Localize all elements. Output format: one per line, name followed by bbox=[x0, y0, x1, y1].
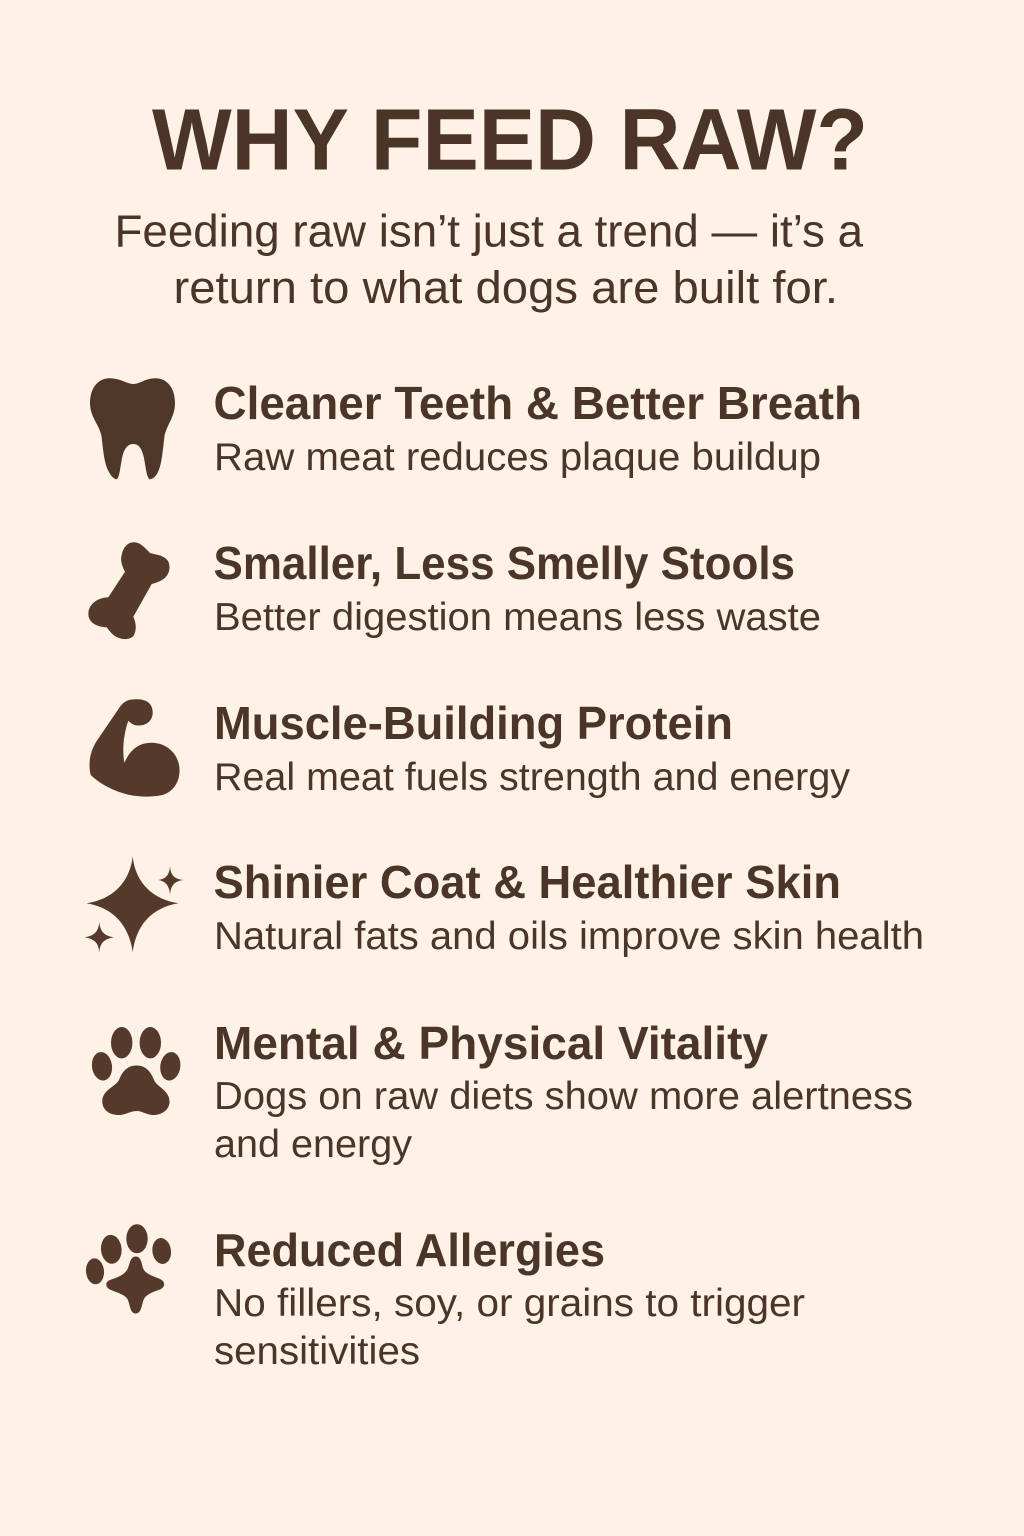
description: No fillers, soy, or grains to trigger bbox=[214, 1282, 805, 1325]
description: Natural fats and oils improve skin health bbox=[214, 915, 924, 958]
heading: Cleaner Teeth & Better Breath bbox=[214, 377, 862, 429]
heading: Smaller, Less Smelly Stools bbox=[214, 537, 795, 589]
benefit: vitality bbox=[90, 1017, 913, 1166]
icon: paw with star pad bbox=[85, 1224, 173, 1314]
intro text: return to what dogs are built for. bbox=[174, 262, 838, 313]
benefit: muscle protein bbox=[90, 697, 850, 799]
intro text: Feeding raw isn’t just a trend — it’s a bbox=[114, 206, 864, 256]
title: WHY FEED RAW? bbox=[152, 92, 868, 188]
benefit: smaller stools bbox=[88, 537, 821, 639]
description bbox=[214, 1282, 805, 1373]
benefit: shinier coat bbox=[84, 856, 924, 958]
icon: flexed arm bbox=[90, 699, 180, 797]
icon: bone bbox=[88, 542, 170, 639]
intro text bbox=[114, 206, 864, 313]
icon: tooth bbox=[90, 378, 175, 479]
description: and energy bbox=[214, 1123, 413, 1166]
heading: Mental & Physical Vitality bbox=[214, 1017, 768, 1069]
benefit: reduced allergies bbox=[85, 1224, 805, 1373]
description: Raw meat reduces plaque buildup bbox=[214, 436, 821, 479]
description bbox=[214, 1075, 913, 1166]
heading: Reduced Allergies bbox=[214, 1224, 605, 1276]
icon: sparkles bbox=[84, 856, 184, 953]
icon: paw print bbox=[90, 1027, 182, 1115]
description: Better digestion means less waste bbox=[214, 596, 821, 639]
description: sensitivities bbox=[214, 1330, 420, 1373]
description: Dogs on raw diets show more alertness bbox=[214, 1075, 913, 1118]
benefit: cleaner teeth bbox=[90, 377, 862, 479]
heading: Muscle-Building Protein bbox=[214, 697, 733, 749]
description: Real meat fuels strength and energy bbox=[214, 756, 850, 799]
heading: Shinier Coat & Healthier Skin bbox=[214, 856, 841, 908]
